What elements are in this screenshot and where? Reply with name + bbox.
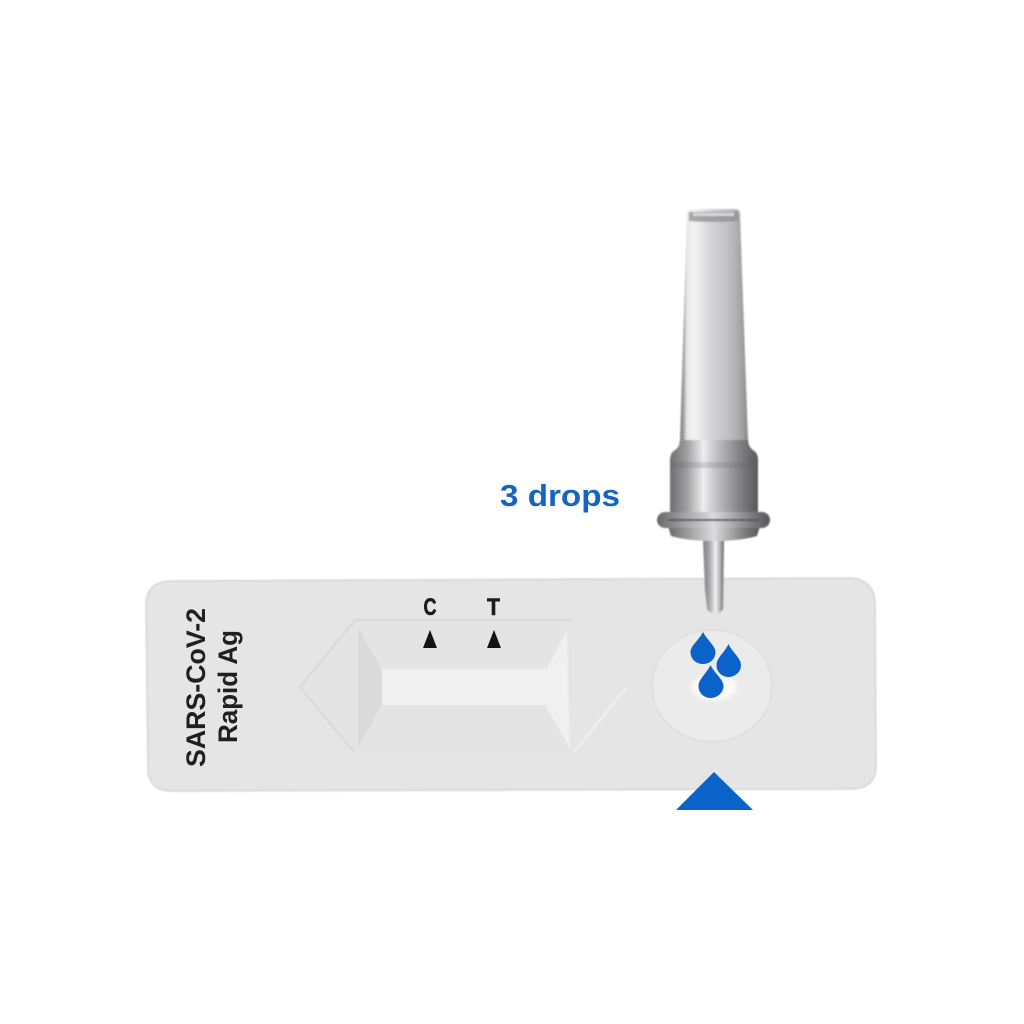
dropper collar [670,438,758,512]
label: control mark: C [424,594,436,621]
window recess outline [300,620,572,753]
sample well [652,630,772,742]
dropper barrel [680,209,748,440]
label: test mark [487,594,501,648]
cassette product name [181,608,243,767]
result window [300,620,627,753]
cassette body [146,578,876,791]
diagonal moulding line [573,687,627,753]
callout: 3 drops: 3 drops [500,478,620,513]
icon: sample position triangle [676,772,753,810]
icon: three blue drops [690,632,741,698]
window left facet [358,627,382,747]
label: control mark [423,594,437,648]
cassette product name: Rapid Ag [213,630,243,743]
well opening [691,674,737,700]
dropper top rim [689,212,738,222]
dropper [657,209,770,613]
cassette product name: SARS-CoV-2 [181,608,211,767]
test cassette [146,209,876,810]
dropper flange [657,512,770,541]
dropper nozzle tip [703,533,724,613]
label: test mark: T [487,594,500,621]
window right bevel [545,630,570,748]
result strip [382,669,547,705]
